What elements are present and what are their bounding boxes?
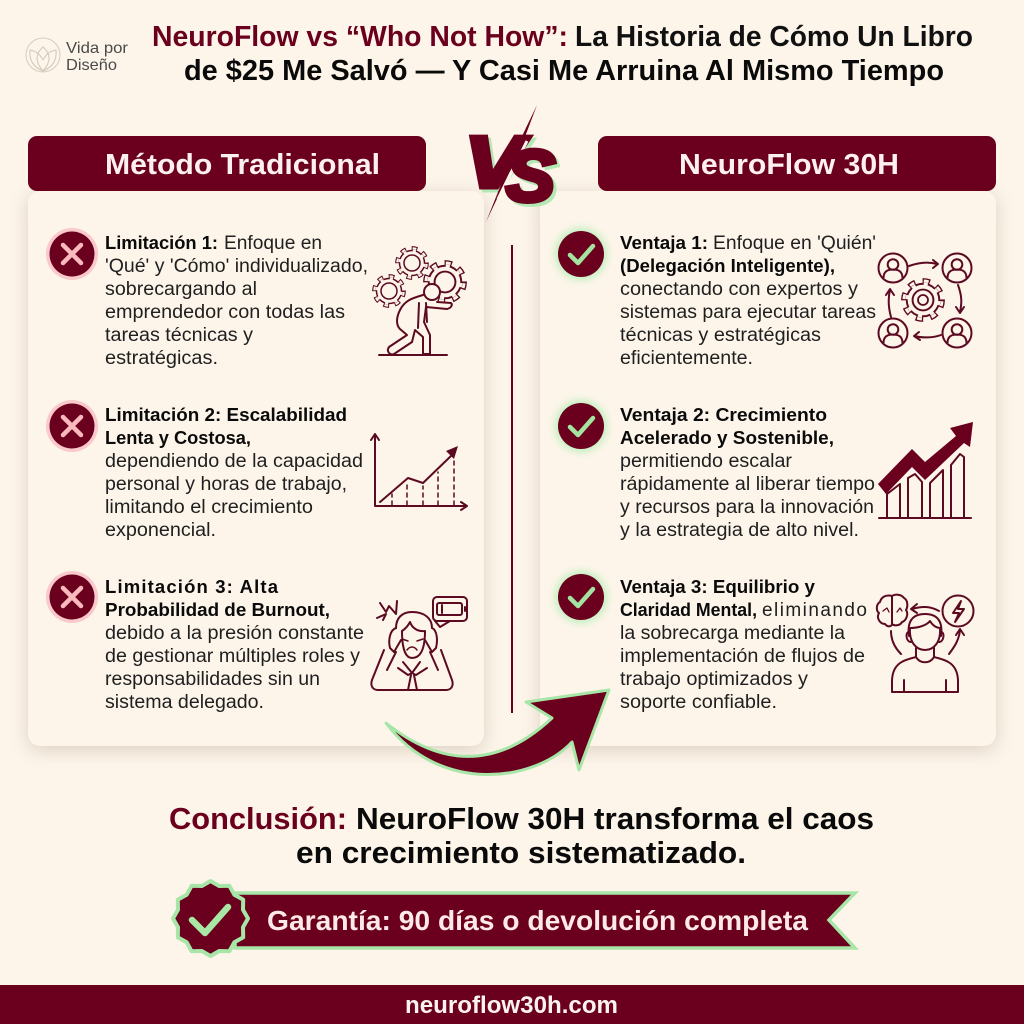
text: advantage 3: implementación de flujos de — [620, 646, 865, 667]
text: limitation 3: Probabilidad de Burnout, — [105, 599, 330, 620]
text: advantage 2: rápidamente al liberar tiempo — [620, 474, 875, 495]
text: limitation 1: Limitación 1: — [105, 232, 218, 253]
icon: x badge 1 — [46, 228, 98, 280]
logo: Vida por Diseño — [26, 38, 129, 74]
text: advantage 3: soporte confiable. — [620, 692, 777, 713]
icon: burnout person with low battery — [371, 597, 467, 690]
conclusion: en crecimiento sistematizado. — [296, 835, 746, 870]
icon: check badge 1 — [555, 228, 607, 280]
logo: Vida por Diseño: Diseño — [66, 57, 117, 74]
footer bar — [0, 985, 1024, 1024]
VS emblem: S — [506, 137, 555, 217]
text: limitation 2: Limitación 2: Escalabilidad — [105, 404, 347, 425]
advantage 3 — [555, 571, 974, 713]
icon: growth bars and arrow — [878, 422, 973, 518]
advantage 2 — [555, 400, 973, 541]
text: advantage 2: Acelerado y Sostenible, — [620, 427, 834, 448]
logo: Vida por Diseño: Vida por — [66, 40, 129, 57]
limitation 1 — [46, 228, 464, 369]
panel: método tradicional — [28, 191, 484, 746]
title: NeuroFlow vs “Who Not How”: — [152, 21, 568, 53]
text: limitation 2: exponencial. — [105, 520, 216, 541]
icon: check badge 2 — [555, 400, 607, 452]
text: advantage 1: eficientemente. — [620, 348, 753, 369]
text: limitation 2: Lenta y Costosa, — [105, 427, 251, 448]
text: limitation 1: sobrecargando al — [105, 279, 257, 300]
VS emblem — [465, 105, 555, 222]
text: limitation 2: personal y horas de trabajo, — [105, 474, 347, 495]
text: advantage 1: Enfoque en 'Quién' — [713, 233, 876, 254]
header: neuroflow 30h: NeuroFlow 30H — [679, 149, 899, 181]
text: advantage 1: sistemas para ejecutar tareas — [620, 302, 876, 323]
text: limitation 2 — [105, 404, 363, 541]
panel: neuroflow 30h — [540, 191, 996, 746]
icon: delegation network — [878, 254, 972, 348]
text: limitation 1: 'Qué' y 'Cómo' individualizado, — [105, 256, 368, 277]
text: advantage 2: y recursos para la innovación — [620, 497, 874, 518]
footer bar: neuroflow30h.com — [405, 992, 618, 1019]
text: limitation 1: tareas técnicas y — [105, 325, 254, 346]
text: limitation 1: emprendedor con todas las — [105, 302, 345, 323]
text: advantage 1: técnicas y estratégicas — [620, 325, 821, 346]
conclusion: NeuroFlow 30H transforma el caos — [356, 801, 874, 836]
text: limitation 2: limitando el crecimiento — [105, 497, 313, 518]
text: advantage 3: Claridad Mental, — [620, 599, 757, 620]
text: advantage 3: Ventaja 3: Equilibrio y — [620, 576, 816, 597]
limitation 3 — [46, 571, 467, 713]
text: advantage 2 — [620, 404, 875, 541]
text: limitation 3: Limitación 3: Alta — [105, 576, 279, 597]
title — [152, 21, 973, 87]
icon: x badge 3 — [46, 571, 98, 623]
icon: x badge 2 — [46, 400, 98, 452]
title: de $25 Me Salvó — Y Casi Me Arruina Al Mismo Tiempo — [184, 55, 944, 87]
text: advantage 1: Ventaja 1: — [620, 232, 708, 253]
header: método tradicional — [28, 136, 426, 191]
advantage 1 — [555, 228, 972, 369]
text: advantage 3 — [620, 576, 867, 713]
text: limitation 3: sistema delegado. — [105, 692, 264, 713]
icon: person carrying gears — [374, 248, 464, 355]
icon: seal with check — [173, 881, 248, 956]
title: La Historia de Cómo Un Libro — [575, 21, 973, 53]
text: advantage 1 — [620, 232, 876, 369]
text: limitation 1 — [105, 232, 368, 369]
arrow: transformation — [386, 690, 609, 775]
guarantee ribbon: Garantía: 90 días o devolución completa — [267, 905, 808, 936]
icon: check badge 3 — [555, 571, 607, 623]
icon: person with brain and energy — [877, 595, 974, 692]
text: limitation 3: responsabilidades sin un — [105, 669, 320, 690]
text: limitation 1: estratégicas. — [105, 348, 218, 369]
text: advantage 2: permitiendo escalar — [620, 451, 793, 472]
text: limitation 1: Enfoque en — [224, 233, 322, 254]
text: advantage 2: y la estrategia de alto nivel. — [620, 520, 859, 541]
guarantee ribbon — [173, 881, 855, 956]
icon: slow line chart — [371, 434, 467, 510]
text: limitation 3: de gestionar múltiples roles y — [105, 646, 361, 667]
text: advantage 1: (Delegación Inteligente), — [620, 255, 835, 276]
text: limitation 2: dependiendo de la capacidad — [105, 451, 363, 472]
text: advantage 3: eliminando — [762, 600, 867, 621]
text: limitation 3: debido a la presión constante — [105, 623, 364, 644]
center divider — [511, 245, 513, 713]
text: advantage 3: trabajo optimizados y — [620, 669, 809, 690]
VS emblem: V — [465, 123, 530, 203]
conclusion: Conclusión: — [169, 801, 347, 836]
text: advantage 2: Ventaja 2: Crecimiento — [620, 404, 827, 425]
header: neuroflow 30h — [598, 136, 996, 191]
text: advantage 1: conectando con expertos y — [620, 279, 859, 300]
text: limitation 3 — [105, 576, 364, 713]
conclusion — [169, 801, 874, 870]
limitation 2 — [46, 400, 467, 541]
text: advantage 3: la sobrecarga mediante la — [620, 623, 845, 644]
header: método tradicional: Método Tradicional — [105, 149, 380, 181]
